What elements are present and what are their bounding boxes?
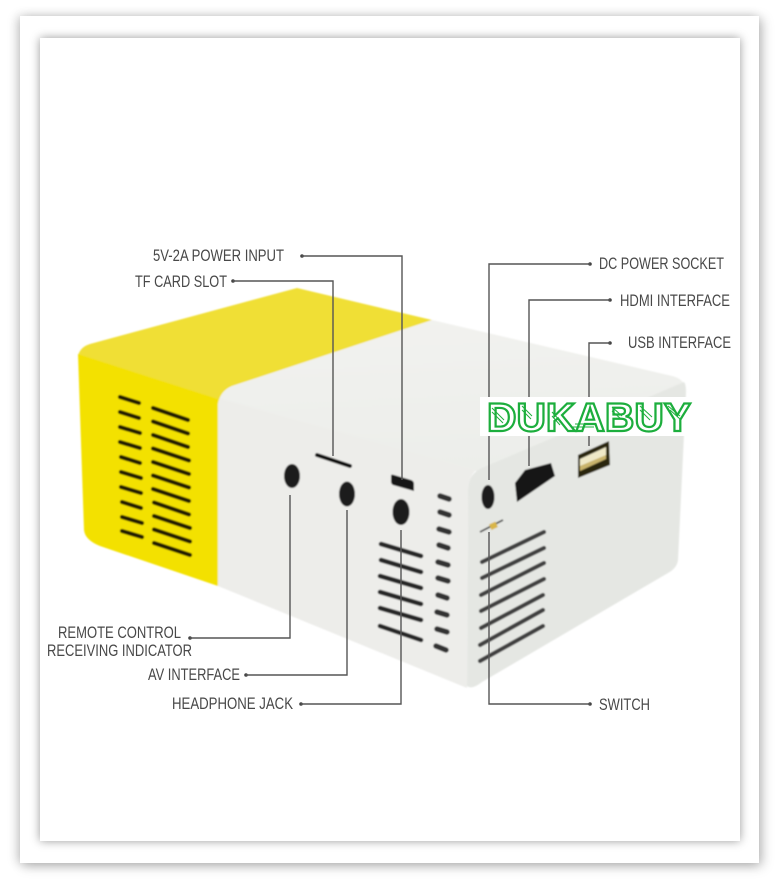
callout: AV interface: AV INTERFACE (148, 665, 240, 684)
callout: HDMI interface: HDMI INTERFACE (620, 291, 730, 310)
headphone jack (392, 499, 410, 525)
AV jack (339, 482, 355, 506)
yellow side vents, left column (120, 397, 142, 537)
right side vents (480, 532, 544, 661)
callout: USB interface (589, 333, 731, 446)
callout: switch: SWITCH (599, 695, 650, 714)
power input slot (391, 475, 414, 491)
callout: switch (489, 532, 650, 714)
callout: remote control receiving indicator: RECEIVING INDICATOR (47, 641, 192, 660)
yellow side vents, right column (153, 408, 190, 555)
DC power socket (482, 485, 494, 509)
front pill vents (436, 496, 449, 650)
callout: TF card slot (135, 272, 333, 456)
white top face (218, 320, 685, 472)
switch (480, 520, 503, 532)
projector body (78, 288, 686, 688)
TF card slot (317, 455, 350, 466)
callout: headphone jack: HEADPHONE JACK (172, 694, 294, 713)
callout: DC power socket (489, 254, 724, 480)
HDMI port (515, 463, 555, 502)
yellow top face (78, 288, 432, 404)
callout: USB interface: USB INTERFACE (628, 333, 731, 352)
callout: remote control receiving indicator (47, 495, 290, 660)
right face (467, 382, 686, 687)
callout: AV interface (148, 510, 347, 684)
callout: TF card slot: TF CARD SLOT (135, 272, 227, 291)
USB port (578, 441, 610, 478)
callout: 5V-2A power input (153, 246, 402, 480)
callout: remote control receiving indicator: REMOTE CONTROL (58, 623, 181, 642)
front long vents (380, 544, 421, 640)
yellow side face (78, 354, 218, 586)
callout: headphone jack (172, 530, 401, 713)
callout: DC power socket: DC POWER SOCKET (599, 254, 724, 273)
watermark logo: DUKABUY (487, 396, 691, 440)
callout: HDMI interface (529, 291, 730, 466)
remote control receiver (284, 464, 300, 488)
callout: 5V-2A power input: 5V-2A POWER INPUT (153, 246, 284, 265)
white front face (218, 398, 476, 688)
